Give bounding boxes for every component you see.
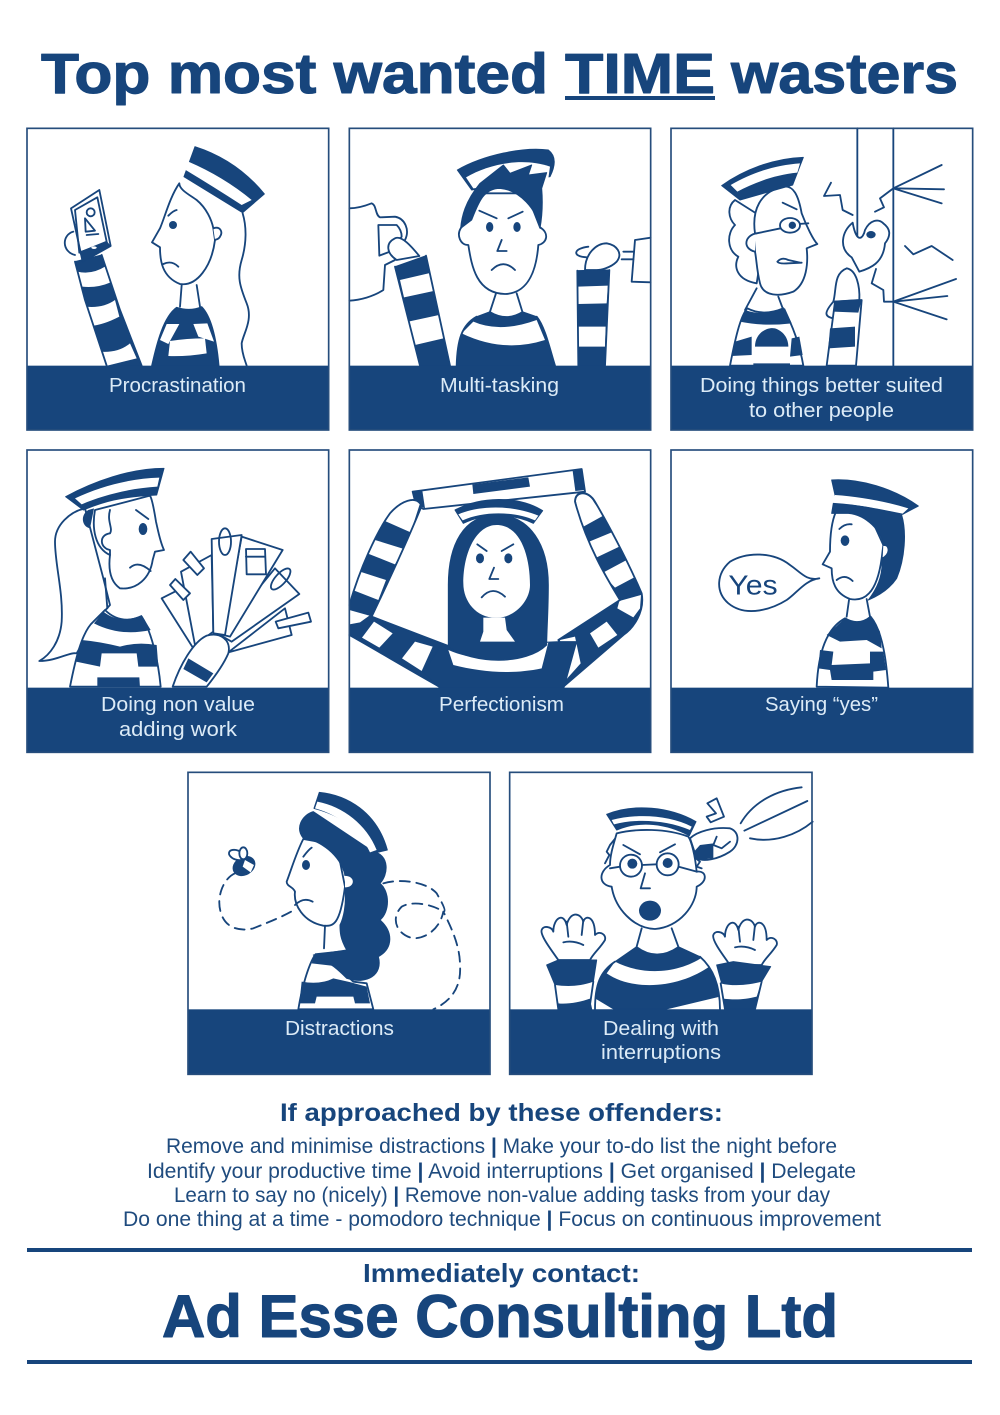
- icon: fan of papers: [162, 528, 311, 687]
- caption: adding work: [119, 719, 238, 741]
- raised right hand: [713, 920, 777, 1009]
- panel: distractions: [188, 772, 490, 1074]
- caption bar: [349, 688, 651, 752]
- contact prompt: Immediately contact:: [363, 1258, 640, 1288]
- left arm: [388, 238, 450, 366]
- raised right arm: [558, 493, 642, 687]
- icon: spirit level: [413, 469, 585, 509]
- text block: advice list: Learn to say no (nicely) | Remove non-value adding tasks from your day: [174, 1184, 830, 1207]
- panel: saying yes: [671, 450, 973, 752]
- icon: interruption marks: [707, 787, 813, 840]
- icon: wrench and arm: [826, 221, 889, 366]
- icon: bee and dashed flight path: [219, 847, 460, 1009]
- caption: Perfectionism: [439, 694, 564, 716]
- caption: Procrastination: [109, 375, 246, 397]
- figure: woman in profile: [152, 147, 264, 366]
- panel: dealing with interruptions: [510, 772, 813, 1074]
- caption: interruptions: [601, 1042, 721, 1064]
- panel: perfectionism: [349, 450, 651, 752]
- title: TIME: [565, 42, 715, 106]
- figure: man in profile: [817, 480, 918, 688]
- heading: advice: If approached by these offenders:: [280, 1099, 723, 1127]
- company name: Ad Esse Consulting Ltd: [162, 1283, 838, 1350]
- speech bubble: Yes: [728, 569, 778, 600]
- title: Top most wanted: [41, 42, 548, 106]
- caption: Doing non value: [101, 694, 255, 716]
- caption: Dealing with: [603, 1018, 719, 1040]
- figure: woman with ponytail: [39, 468, 164, 688]
- caption: to other people: [749, 400, 894, 422]
- caption: [700, 375, 943, 422]
- text block: advice list: Identify your productive time | Avoid interruptions | Get organised | Delegate: [147, 1160, 856, 1183]
- speech bubble: [719, 555, 819, 611]
- title: [41, 42, 958, 106]
- caption: Distractions: [285, 1018, 394, 1040]
- caption bar: [27, 366, 329, 430]
- figure: woman with long dark hair: [423, 499, 577, 688]
- caption bar: [510, 1009, 812, 1074]
- text block: advice list: [123, 1135, 881, 1231]
- raised left arm: [349, 500, 450, 687]
- icon: mug: [349, 203, 407, 301]
- caption: [101, 694, 255, 741]
- caption: Doing things better suited: [700, 375, 943, 397]
- icon: phone and raised arm: [65, 190, 142, 366]
- panel: multi-tasking: [349, 128, 651, 430]
- caption: Multi-tasking: [440, 375, 559, 397]
- panel: procrastination: [27, 128, 329, 430]
- raised left hand: [541, 915, 605, 1009]
- caption bar: [27, 688, 329, 752]
- caption bar: [671, 688, 973, 752]
- figure: curly-haired person with glasses: [722, 157, 817, 366]
- panel: doing non value adding work: [27, 450, 329, 752]
- caption bar: [349, 366, 651, 430]
- figure: spiky-haired man: [457, 149, 555, 366]
- caption: [601, 1018, 721, 1064]
- pipes and cracks: [824, 128, 956, 366]
- figure: woman with curly hair: [287, 792, 390, 1009]
- caption: Saying “yes”: [765, 694, 878, 716]
- caption bar: [188, 1009, 490, 1074]
- caption bar: [671, 366, 973, 430]
- text block: advice list: Remove and minimise distractions | Make your to-do list the night before: [166, 1135, 837, 1158]
- title: wasters: [730, 42, 958, 106]
- right arm with screwdriver: [576, 238, 651, 366]
- figure: man with glasses: [595, 808, 737, 1009]
- panel: doing things better suited to other people: [671, 128, 973, 430]
- text block: advice list: Do one thing at a time - pomodoro technique | Focus on continuous improvement: [123, 1208, 881, 1231]
